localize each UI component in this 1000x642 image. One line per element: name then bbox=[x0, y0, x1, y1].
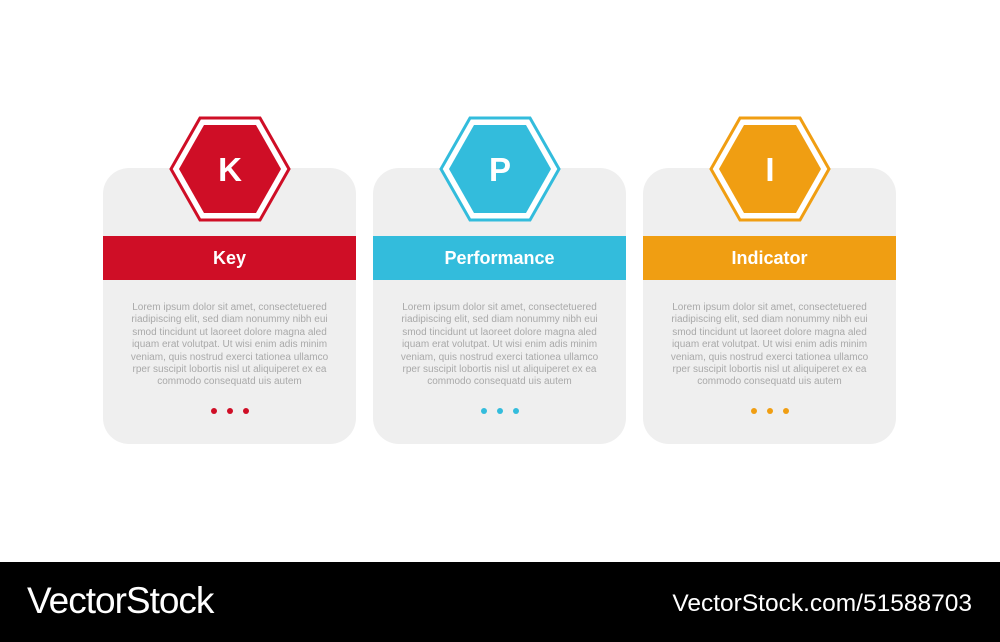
text: performance: commodo consequatd uis autem bbox=[427, 376, 572, 387]
text: performance: smod tincidunt ut laoreet dolore magna aled bbox=[402, 327, 597, 338]
icon: hexagon P: P bbox=[489, 151, 511, 188]
icon: hexagon P bbox=[439, 116, 561, 222]
card: key bbox=[103, 168, 356, 444]
footer logo: VectorStock bbox=[27, 580, 213, 621]
text: indicator: Lorem ipsum dolor sit amet, consectetuered bbox=[672, 302, 867, 313]
text: key: smod tincidunt ut laoreet dolore magna aled bbox=[132, 327, 327, 338]
text: performance: Lorem ipsum dolor sit amet, consectetuered bbox=[402, 302, 597, 313]
text: indicator: riadipiscing elit, sed diam nonummy nibh eui bbox=[671, 314, 868, 325]
band: key: Key bbox=[213, 248, 246, 268]
dots: performance bbox=[481, 408, 519, 414]
icon: hexagon I: I bbox=[765, 151, 775, 188]
text: key: Lorem ipsum dolor sit amet, consectetuered bbox=[132, 302, 327, 313]
band: performance bbox=[373, 236, 626, 280]
text: indicator: iquam erat volutpat. Ut wisi enim adis minim bbox=[672, 339, 867, 350]
icon: hexagon I bbox=[709, 116, 831, 222]
dots: indicator bbox=[751, 408, 789, 414]
text: performance: veniam, quis nostrud exerci tationea ullamco bbox=[401, 352, 598, 363]
footer id: VectorStock.com/51588703 bbox=[672, 590, 972, 617]
text: key: rper suscipit lobortis nisl ut aliquiperet ex ea bbox=[132, 364, 326, 375]
text: indicator: veniam, quis nostrud exerci tationea ullamco bbox=[671, 352, 868, 363]
band: indicator: Indicator bbox=[731, 248, 808, 268]
band: indicator bbox=[643, 236, 896, 280]
text: key bbox=[131, 302, 328, 387]
text: performance: iquam erat volutpat. Ut wisi enim adis minim bbox=[402, 339, 597, 350]
text: key: iquam erat volutpat. Ut wisi enim adis minim bbox=[132, 339, 327, 350]
icon: hexagon K: K bbox=[218, 151, 242, 188]
text: performance: riadipiscing elit, sed diam nonummy nibh eui bbox=[401, 314, 598, 325]
text: indicator bbox=[671, 302, 868, 387]
text: key: veniam, quis nostrud exerci tationea ullamco bbox=[131, 352, 328, 363]
text: indicator: smod tincidunt ut laoreet dolore magna aled bbox=[672, 327, 867, 338]
icon: hexagon K bbox=[169, 116, 291, 222]
text: indicator: commodo consequatd uis autem bbox=[697, 376, 842, 387]
text: performance bbox=[401, 302, 598, 387]
card: performance bbox=[373, 168, 626, 444]
text: performance: rper suscipit lobortis nisl ut aliquiperet ex ea bbox=[402, 364, 596, 375]
band: performance: Performance bbox=[444, 248, 555, 268]
footer bar bbox=[0, 562, 1000, 642]
text: key: riadipiscing elit, sed diam nonummy nibh eui bbox=[131, 314, 328, 325]
text: key: commodo consequatd uis autem bbox=[157, 376, 302, 387]
band: key bbox=[103, 236, 356, 280]
text: indicator: rper suscipit lobortis nisl ut aliquiperet ex ea bbox=[672, 364, 866, 375]
card: indicator bbox=[643, 168, 896, 444]
dots: key bbox=[211, 408, 249, 414]
